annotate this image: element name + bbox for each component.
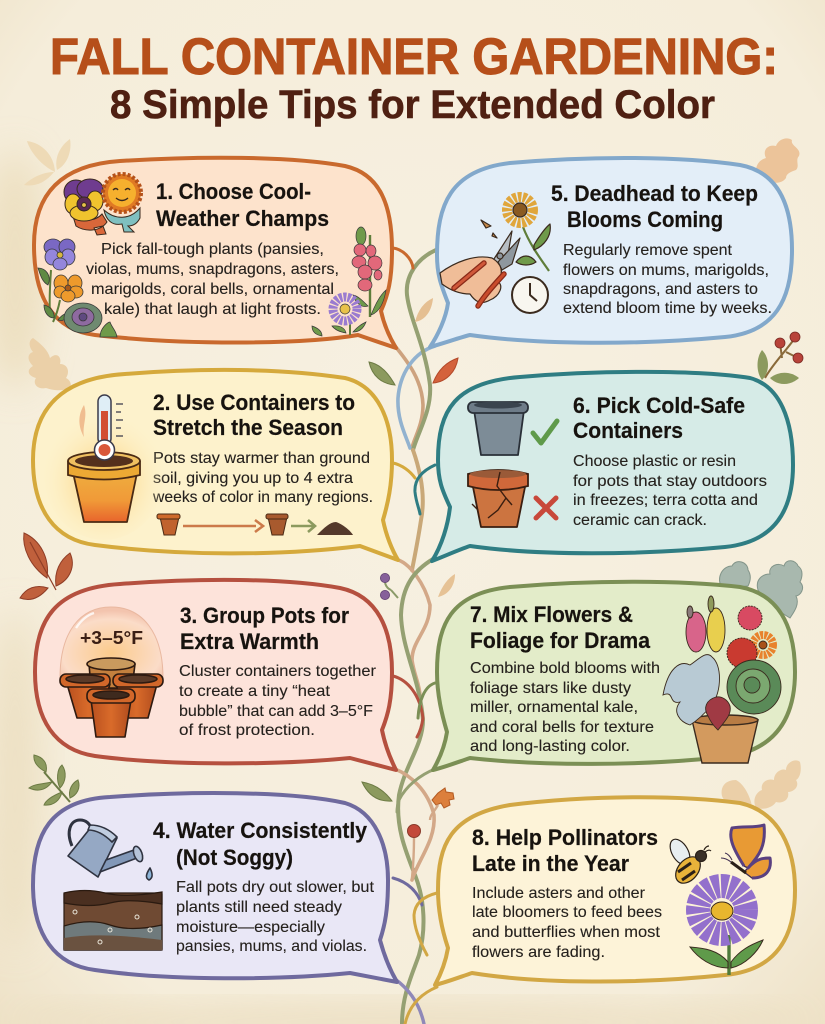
- tan vine mid: [412, 450, 423, 570]
- body 6: Choose plastic or resin: [573, 453, 736, 470]
- heading 8: Late in the Year: [472, 851, 629, 876]
- panel: tip 7 mix flowers and foliage: [433, 582, 795, 770]
- heading 1: [156, 179, 329, 231]
- body 4: pansies, mums, and violas.: [176, 938, 367, 955]
- olive vine lower: [398, 559, 433, 1024]
- heading 1: Weather Champs: [156, 206, 329, 231]
- body 6: ceramic can crack.: [573, 512, 707, 529]
- heading 7: 7. Mix Flowers &: [470, 602, 633, 627]
- icon: pansy and sun with scarves: [64, 174, 141, 235]
- icon: heat bubble with pots: [60, 607, 163, 737]
- body 2: [152, 450, 373, 506]
- bubble 3: [35, 580, 396, 770]
- decor: oak leaf top right: [756, 138, 799, 183]
- body 3: [179, 663, 377, 739]
- olive vine upper: [407, 250, 436, 450]
- heading 5: Blooms Coming: [567, 207, 723, 232]
- body 5: extend bloom time by weeks.: [563, 300, 772, 317]
- body 6: in freezes; terra cotta and: [573, 492, 758, 509]
- icon: thermometer and glowing pot: [44, 395, 164, 540]
- panel: tip 6 cold-safe containers: [432, 372, 793, 561]
- heading 3: Extra Warmth: [180, 629, 319, 654]
- heading 7: [470, 602, 650, 653]
- body 8: [472, 885, 662, 961]
- body 1: marigolds, coral bells, ornamental: [91, 281, 334, 298]
- body 5: flowers on mums, marigolds,: [563, 262, 769, 279]
- body 7: [470, 660, 660, 755]
- heading 6: [573, 393, 745, 443]
- body 3: bubble” that can add 3–5°F: [179, 703, 373, 720]
- heading 6: 6. Pick Cold-Safe: [573, 393, 745, 418]
- icon: cracked pot with cross: [468, 470, 556, 527]
- body 3: of frost protection.: [179, 722, 315, 739]
- icon: pruners, hand and flower: [440, 197, 550, 313]
- body 4: [176, 879, 375, 955]
- panel: tip 1 cool-weather champs: [34, 158, 396, 348]
- heading 7: Foliage for Drama: [470, 628, 650, 653]
- title: [50, 28, 778, 127]
- bubble 5: [430, 158, 792, 347]
- heading 8: 8. Help Pollinators: [472, 825, 658, 850]
- body 1: Pick fall-tough plants (pansies,: [101, 241, 324, 258]
- decor: green sprig: [29, 755, 79, 805]
- body 6: for pots that stay outdoors: [573, 473, 767, 490]
- panel: tip 5 deadhead: [430, 158, 792, 347]
- orange-tan vine from tip 1: [395, 346, 423, 448]
- body 4: plants still need steady: [176, 899, 342, 916]
- icon: pot to soil progression: [157, 514, 353, 535]
- decor: oak leaf lower right: [722, 760, 801, 809]
- tan vine from tip 2: [395, 559, 430, 696]
- heading 4: (Not Soggy): [176, 845, 293, 870]
- heading 4: [153, 818, 367, 870]
- panel: tip 4 water consistently: [33, 793, 397, 982]
- body 2: Pots stay warmer than ground: [153, 450, 370, 467]
- heading 3: 3. Group Pots for: [180, 603, 349, 628]
- tan vine from tip 3: [395, 769, 434, 880]
- heading 5: [551, 181, 758, 232]
- decor: red leaves: [20, 533, 72, 599]
- body 8: and butterflies when most: [472, 924, 661, 941]
- body 7: Combine bold blooms with: [470, 660, 660, 677]
- decor: berries right: [758, 332, 803, 384]
- heading 5: 5. Deadhead to Keep: [551, 181, 758, 206]
- heading 2: Stretch the Season: [153, 415, 343, 440]
- vine leaves and berries: [362, 298, 458, 878]
- body 4: moisture—especially: [176, 919, 325, 936]
- icon: soil layers: [64, 890, 162, 950]
- icon: heat bubble with pots: +3–5°F: [80, 628, 143, 648]
- heading 3: [180, 603, 349, 654]
- bubble 2: [33, 370, 398, 560]
- body 8: flowers are fading.: [472, 944, 605, 961]
- body 2: weeks of color in many regions.: [152, 489, 373, 506]
- bubble 1: [34, 158, 396, 348]
- body 5: snapdragons, and asters to: [563, 281, 758, 298]
- bubble 6: [432, 372, 793, 561]
- title: 8 Simple Tips for Extended Color: [110, 83, 715, 127]
- icon: snapdragon and aster: [312, 227, 386, 336]
- central vines: [393, 248, 437, 1024]
- body 7: miller, ornamental kale,: [470, 699, 638, 716]
- body 5: Regularly remove spent: [563, 242, 733, 259]
- decor: oak leaf left: [28, 338, 71, 390]
- stubs to bubbles: [393, 248, 413, 268]
- body 1: violas, mums, snapdragons, asters,: [86, 261, 339, 278]
- decor: tan leaves top left: [24, 139, 70, 185]
- icon: bouquet in pot: [663, 596, 781, 763]
- decor: dusty miller leaves: [720, 561, 803, 618]
- heading 2: [153, 390, 355, 440]
- icon: watering can: [68, 820, 152, 880]
- body 2: soil, giving you up to 4 extra: [153, 470, 353, 487]
- body 6: [573, 453, 767, 529]
- heading 6: Containers: [573, 418, 683, 443]
- bubble 4: [33, 793, 397, 982]
- heading 8: [472, 825, 658, 876]
- panel: tip 3 group pots: [35, 580, 396, 770]
- panel: tip 2 containers: [33, 370, 398, 560]
- body 8: late bloomers to feed bees: [472, 904, 662, 921]
- body 4: Fall pots dry out slower, but: [176, 879, 375, 896]
- blue vine from tip 5: [398, 346, 435, 448]
- icon: purple aster: [690, 886, 763, 975]
- icon: bee: [666, 836, 711, 888]
- body 3: to create a tiny “heat: [179, 683, 331, 700]
- icon: plastic pot with check: [468, 402, 557, 455]
- body 1: [86, 241, 339, 318]
- icon: butterfly: [721, 825, 770, 878]
- heading 1: 1. Choose Cool-: [156, 179, 311, 204]
- heading 2: 2. Use Containers to: [153, 390, 355, 415]
- icon: left flowers and kale: [38, 239, 117, 337]
- body 1: kale) that laugh at light frosts.: [104, 301, 321, 318]
- body 5: [563, 242, 772, 317]
- bubble 7: [433, 582, 795, 770]
- body 7: and long-lasting color.: [470, 738, 630, 755]
- heading 4: 4. Water Consistently: [153, 818, 367, 843]
- body 3: Cluster containers together: [179, 663, 377, 680]
- bubble 8: [435, 797, 795, 985]
- title: FALL CONTAINER GARDENING:: [50, 28, 778, 85]
- body 8: Include asters and other: [472, 885, 646, 902]
- panel: tip 8 help pollinators: [435, 797, 795, 985]
- body 7: and coral bells for texture: [470, 719, 654, 736]
- body 7: foliage stars like dusty: [470, 680, 631, 697]
